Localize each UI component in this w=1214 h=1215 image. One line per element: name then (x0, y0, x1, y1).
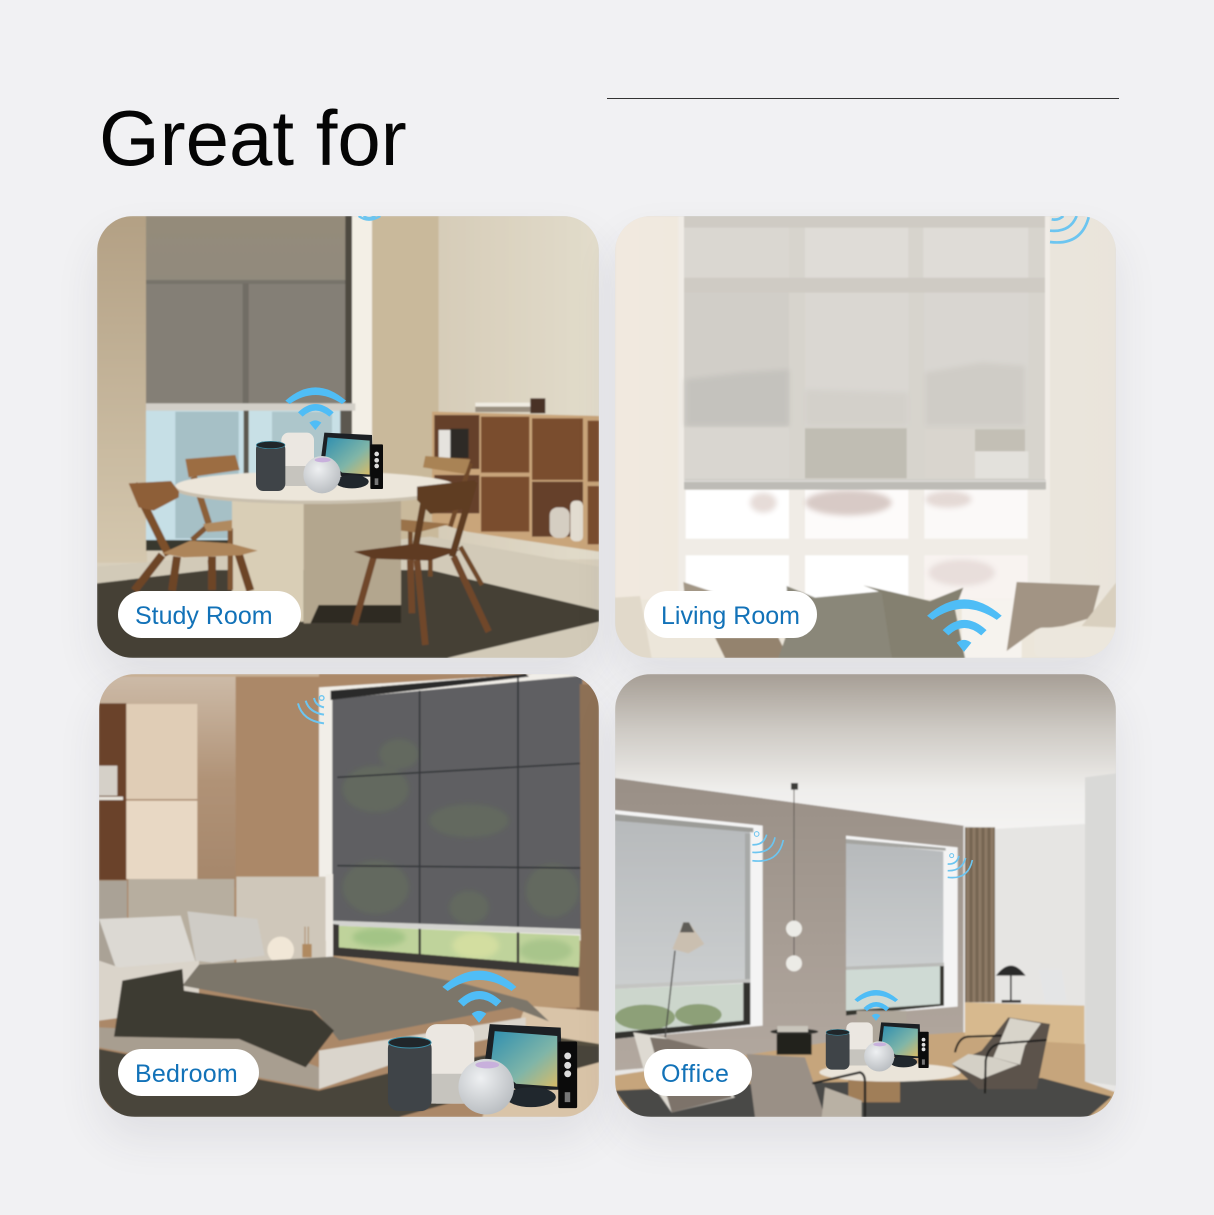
bedroom scene (99, 674, 599, 1117)
bookshelf (432, 398, 599, 552)
smart devices (826, 1022, 929, 1071)
floor lamp (665, 922, 704, 1039)
panel: office (615, 674, 1116, 1117)
curtain (965, 827, 995, 1002)
icon: wifi signal (285, 387, 346, 430)
pillows (99, 911, 265, 972)
label: study room (118, 591, 301, 638)
icon: signal arcs (1050, 216, 1089, 242)
icon: signal arcs, left window (752, 832, 783, 861)
side table (770, 1026, 818, 1055)
icon: signal arcs (298, 696, 324, 723)
label: bedroom: Bedroom (135, 1060, 238, 1088)
desk with lamp and monitor (965, 966, 1084, 1044)
icon: wifi signal (854, 990, 898, 1021)
back right chair (401, 456, 482, 585)
smart devices (388, 1024, 577, 1115)
curtain (576, 684, 599, 1011)
label: bedroom (118, 1049, 259, 1096)
rug (99, 1044, 599, 1117)
front left chair (129, 481, 258, 591)
label: office (644, 1049, 752, 1096)
label: study room: Study Room (135, 602, 273, 630)
headboard (99, 877, 326, 977)
icon: signal arcs, right window (948, 854, 972, 878)
smart devices (256, 433, 383, 493)
panel: study room (97, 216, 599, 658)
label: living room (644, 591, 817, 638)
panel: living room (615, 216, 1116, 658)
living room scene (615, 216, 1116, 658)
left armchair (633, 1032, 735, 1112)
icon: wifi signal (442, 971, 516, 1023)
floor (615, 1032, 1116, 1117)
back left chair (185, 455, 240, 590)
front right chair (354, 480, 489, 645)
center armchair (747, 1054, 865, 1117)
office scene (615, 674, 1116, 1117)
study room scene (97, 216, 599, 658)
label: living room: Living Room (661, 602, 800, 630)
right armchair (952, 1017, 1050, 1093)
label: office: Office (661, 1060, 729, 1088)
icon: wifi signal (927, 599, 1002, 652)
table top (175, 471, 455, 504)
table pedestal (232, 497, 401, 623)
left window (615, 810, 763, 1039)
right window (846, 836, 958, 1016)
panel: bedroom (99, 674, 599, 1117)
title: Great for (99, 94, 407, 182)
bed (99, 957, 549, 1089)
coffee table (819, 1063, 961, 1102)
icon: signal arcs (359, 216, 380, 220)
pendant light (786, 783, 802, 971)
sofa behind table (857, 1011, 907, 1042)
sofa cushions (615, 582, 1116, 658)
bedside lamp and diffuser (267, 927, 312, 963)
